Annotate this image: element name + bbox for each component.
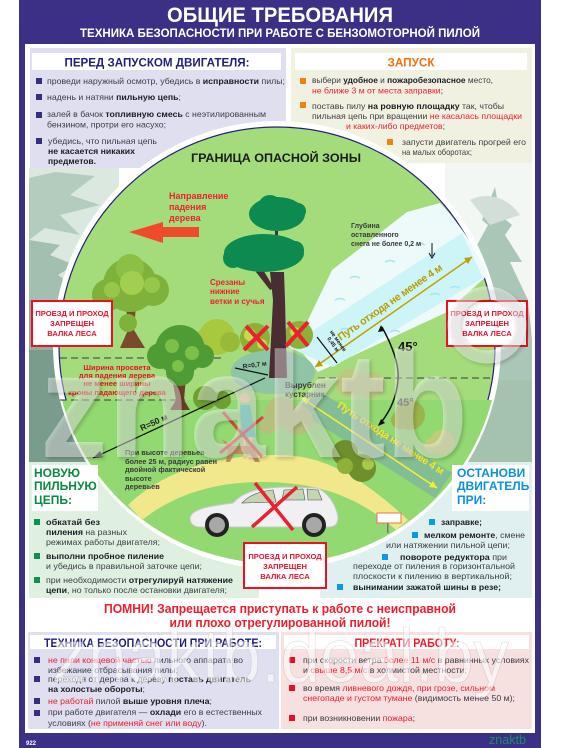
watermark url: znaktb.deal.by	[52, 614, 509, 699]
checklist: и убедись в правильной заточке цепи;	[46, 561, 202, 571]
warning message	[104, 601, 456, 630]
checklist: при скорости ветра более 11 м/с в равнинных условиях	[303, 655, 530, 665]
checklist: не ближе 3 м от места заправки ;	[312, 86, 443, 96]
tree middle left	[147, 325, 214, 410]
sign: right: ЗАПРЕЩЕН	[465, 319, 509, 328]
arrow R 50	[93, 378, 265, 458]
checklist: предметов.	[48, 156, 96, 166]
red cross on car	[252, 483, 297, 530]
forest background right	[445, 163, 532, 462]
checklist: проведи наружный осмотр, убедись в исправности пилы;	[47, 76, 285, 86]
depth label: снега не более 0,2 м	[351, 240, 421, 248]
panel: stop work	[281, 632, 532, 729]
panel: new chain	[29, 462, 259, 598]
cut branches label: нижние	[210, 287, 240, 296]
heading: ТЕХНИКА БЕЗОПАСНОСТИ ПРИ РАБОТЕ:	[44, 638, 262, 650]
sign: bottom	[244, 543, 326, 588]
fall direction label: дерева	[169, 213, 202, 223]
checklist: не пили концевой частью пильного аппарата во	[48, 655, 243, 665]
sign: right: ВАЛКА ЛЕСА	[462, 329, 512, 338]
angle label upper: 45°	[398, 339, 418, 354]
checklist: и свыше 8,5 м/с в холмистой местности;	[303, 665, 467, 675]
sign: bottom: ПРОЕЗД И ПРОХОД	[248, 552, 322, 561]
fall direction label	[169, 191, 228, 223]
checklist: заправке;	[441, 517, 482, 527]
sign: right	[447, 301, 527, 346]
small width label: не менее	[328, 330, 347, 353]
cut branches label: Срезаны	[210, 278, 245, 287]
heading: ПРИ:	[457, 493, 486, 507]
depth label	[351, 222, 421, 248]
lower path label: Путь отхода не менее 4 м	[335, 399, 447, 478]
clearance width text: не менее ширины	[83, 379, 151, 388]
sign: left	[32, 301, 112, 346]
checklist: залей в бачок топливную смесь с неэтилированным	[47, 109, 266, 119]
clearance width text: для падения дерева	[79, 371, 156, 380]
note on tree height: деревьев	[125, 482, 160, 491]
warning message: или плохо отрегулированной пилой!	[170, 615, 390, 630]
R 50 label: R=50 м	[138, 412, 169, 433]
checklist: надень и натяни пильную цепь;	[47, 92, 181, 102]
R 0.7 label: R=0,7 м	[242, 360, 267, 371]
arrow R 0.7	[235, 368, 268, 375]
lower bushes	[258, 369, 454, 482]
checklist: на холостые обороты;	[48, 684, 145, 694]
fall direction label: Направление	[169, 191, 228, 201]
forest background left	[29, 168, 119, 462]
heading: ДВИГАТЕЛЬ	[457, 479, 530, 493]
arrow: fall direction	[129, 222, 199, 243]
clearing around trunk	[231, 350, 315, 394]
angle arc	[379, 327, 398, 425]
sign: bottom: ЗАПРЕЩЕН	[263, 562, 307, 571]
heading: ЦЕПЬ:	[34, 493, 72, 507]
dashed line	[60, 358, 492, 400]
checklist	[34, 655, 263, 728]
checklist: не работай пилой выше уровня плеча ;	[48, 696, 212, 706]
warning message: ПОМНИ! Запрещается приступать к работе с неисправной	[104, 601, 456, 616]
watermark ring	[454, 293, 520, 357]
checklist: повороте редуктора при	[400, 552, 507, 562]
checklist: выполни пробное пиление	[46, 551, 164, 561]
checklist: мелком ремонте, смене	[424, 530, 525, 540]
checklist: цепи, но только после остановки двигателя;	[46, 585, 227, 595]
checklist: при необходимости отрегулируй натяжение	[46, 575, 233, 585]
upper path arrow	[315, 257, 472, 367]
sign: right: ПРОЕЗД И ПРОХОД	[450, 309, 524, 318]
checklist: избежание отбрасывания пилы;	[48, 665, 178, 675]
small warning sign	[377, 513, 401, 533]
red crosses on bushes	[244, 322, 308, 350]
tree left	[92, 254, 169, 348]
checklist: убедись, что пильная цепь	[48, 136, 158, 146]
checklist: снегопаде и густом тумане (видимость менее 50 м);	[303, 693, 515, 703]
small width label: 0,45 м	[325, 336, 340, 353]
heading: ПИЛЬНУЮ	[34, 479, 97, 493]
heading: ПРЕКРАТИ РАБОТУ:	[354, 638, 460, 650]
angle label lower: 45°	[397, 397, 414, 409]
cleared band upper	[288, 233, 483, 367]
panel: stop engine	[320, 462, 532, 598]
circle heading: ГРАНИЦА ОПАСНОЙ ЗОНЫ	[191, 152, 361, 165]
felled area label: кустарник	[285, 390, 326, 399]
checklist: поставь пилу на ровную площадку так, чтобы	[312, 101, 504, 111]
checklist: запусти двигатель прогрей его	[402, 137, 526, 147]
heading: ОСТАНОВИ	[457, 466, 525, 480]
arrow depth	[429, 243, 435, 258]
checklist: плоскости к пилению в вертикальной;	[353, 571, 512, 581]
small width arrow	[317, 337, 337, 363]
fall direction label: падения	[169, 202, 206, 212]
checklist: бензином, протри его насухо;	[47, 120, 166, 130]
sign: bottom: ВАЛКА ЛЕСА	[260, 572, 310, 581]
car	[190, 487, 338, 537]
checklist: вынимании зажатой шины в резе;	[353, 582, 501, 592]
cleared band lower	[292, 393, 452, 498]
new chain text	[32, 465, 233, 595]
panel: safety during work	[28, 632, 279, 729]
heading	[457, 466, 530, 507]
panel: start	[291, 48, 532, 163]
red cross on person	[220, 412, 263, 457]
title: ОБЩИЕ ТРЕБОВАНИЯ	[167, 4, 393, 27]
checklist	[300, 75, 526, 157]
checklist: не касается никаких	[48, 146, 135, 156]
checklist: при возникновении пожара;	[303, 713, 415, 723]
note on tree height	[125, 448, 217, 491]
checklist: и каких-либо предметов;	[346, 121, 445, 131]
heading: ЗАПУСК	[388, 56, 435, 70]
checklist: пильная цепь при вращении не касалась площадки	[312, 111, 522, 121]
felled area label	[285, 381, 326, 399]
clearance width text	[68, 363, 167, 397]
snow tufts	[335, 244, 460, 332]
checklist: на малых оборотах;	[402, 147, 472, 157]
checklist	[36, 76, 285, 166]
watermark large: znaktb	[40, 321, 468, 489]
checklist: пиления на разных	[46, 527, 128, 537]
heading: НОВУЮ	[34, 466, 80, 480]
ground	[62, 400, 492, 563]
clearance width text: кроны падающего дерева	[68, 388, 167, 397]
stop engine text	[337, 465, 530, 592]
checklist: при работе двигателя — охлади его в естественных	[48, 707, 263, 717]
bushes	[193, 319, 313, 410]
panel: before engine start	[30, 48, 286, 168]
note on tree height: высоте	[125, 474, 152, 483]
main tree	[223, 195, 306, 378]
person with dog	[222, 393, 260, 462]
lower path arrow	[302, 398, 437, 488]
depth label: оставленного	[351, 232, 399, 239]
yellow path	[128, 455, 408, 530]
danger zone circle	[53, 121, 501, 569]
subtitle: ТЕХНИКА БЕЗОПАСНОСТИ ПРИ РАБОТЕ С БЕНЗОМОТОРНОЙ ПИЛОЙ	[80, 25, 480, 40]
checklist: режимах работы двигателя;	[46, 537, 160, 547]
heading: ПЕРЕД ЗАПУСКОМ ДВИГАТЕЛЯ:	[64, 56, 250, 70]
checklist: переходя от дерева к дереву поставь двигатель	[48, 674, 251, 684]
note on tree height: более 25 м, радиус равен	[125, 457, 217, 466]
sign: left: ПРОЕЗД И ПРОХОД	[35, 309, 109, 318]
felled area label: Вырублен	[285, 381, 326, 390]
cut branches label	[210, 278, 265, 306]
snow slope	[296, 203, 488, 372]
checklist: во время ливневого дождя, при грозе, сильном	[303, 683, 495, 693]
checklist	[337, 517, 525, 592]
checklist: условиях (не применяй снег или воду ).	[48, 718, 207, 728]
note on tree height: При высоте деревьев	[125, 448, 205, 457]
small width label	[323, 330, 347, 356]
checklist: обкатай без	[46, 517, 100, 527]
cut branches label: ветки и сучья	[210, 297, 265, 306]
poster code: 922	[26, 741, 37, 747]
note on tree height: двойной фактической	[125, 465, 205, 474]
upper path label: Путь отхода не менее 4 м	[336, 262, 445, 343]
clearance width text: Ширина просвета	[83, 363, 151, 372]
heading	[34, 466, 97, 507]
checklist: выбери удобное и пожаробезопасное место,	[312, 75, 493, 85]
checklist	[289, 655, 530, 723]
checklist	[34, 517, 233, 595]
depth label: Глубина	[351, 222, 380, 230]
checklist: или натяжении пильной цепи;	[386, 540, 510, 550]
sign: left: ВАЛКА ЛЕСА	[47, 329, 97, 338]
checklist: переходе от пиления в горизонтальной	[353, 561, 515, 571]
brand mark: znaktb	[489, 732, 526, 747]
sign: left: ЗАПРЕЩЕН	[50, 319, 94, 328]
